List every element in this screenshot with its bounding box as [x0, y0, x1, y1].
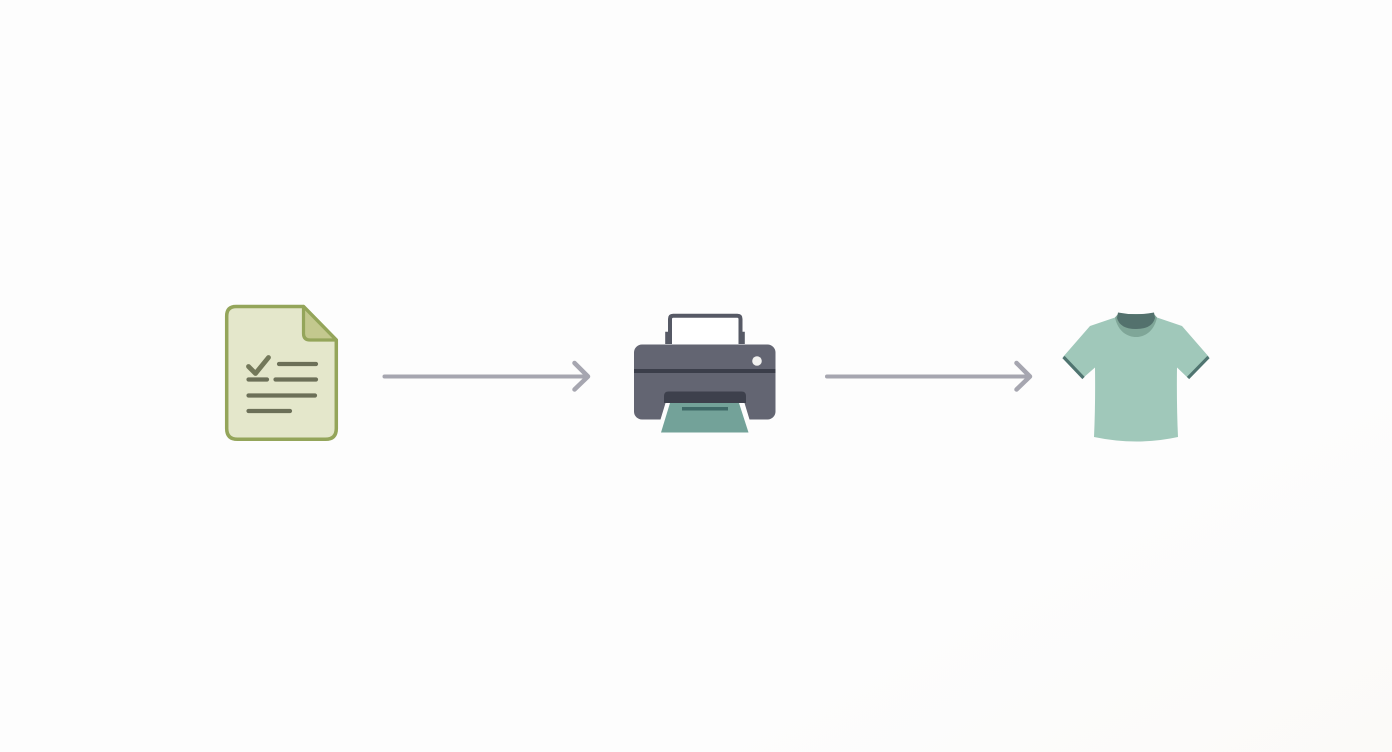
paper handle frame — [670, 316, 740, 344]
printed sheet — [661, 403, 748, 432]
left sleeve cuff — [1064, 357, 1084, 378]
sheet line — [682, 407, 728, 410]
shirt back collar — [1117, 312, 1155, 329]
checklist lines — [248, 364, 316, 411]
folded corner — [304, 306, 336, 340]
paper tray — [667, 334, 743, 344]
check mark — [248, 358, 268, 374]
output slot — [664, 392, 746, 403]
status button — [752, 356, 762, 366]
icon: T-shirt — [1063, 312, 1209, 442]
right sleeve cuff — [1188, 357, 1208, 378]
icon: printer — [634, 316, 776, 432]
icon: document with checklist — [227, 306, 336, 439]
arrow: printer to shirt — [827, 363, 1030, 390]
arrow: document to printer — [384, 363, 588, 390]
neck ribbing — [1115, 314, 1157, 337]
printer body — [634, 344, 776, 420]
body seam — [634, 369, 776, 373]
white paper edge — [660, 403, 750, 420]
document page — [227, 306, 336, 439]
shirt body — [1063, 318, 1209, 442]
